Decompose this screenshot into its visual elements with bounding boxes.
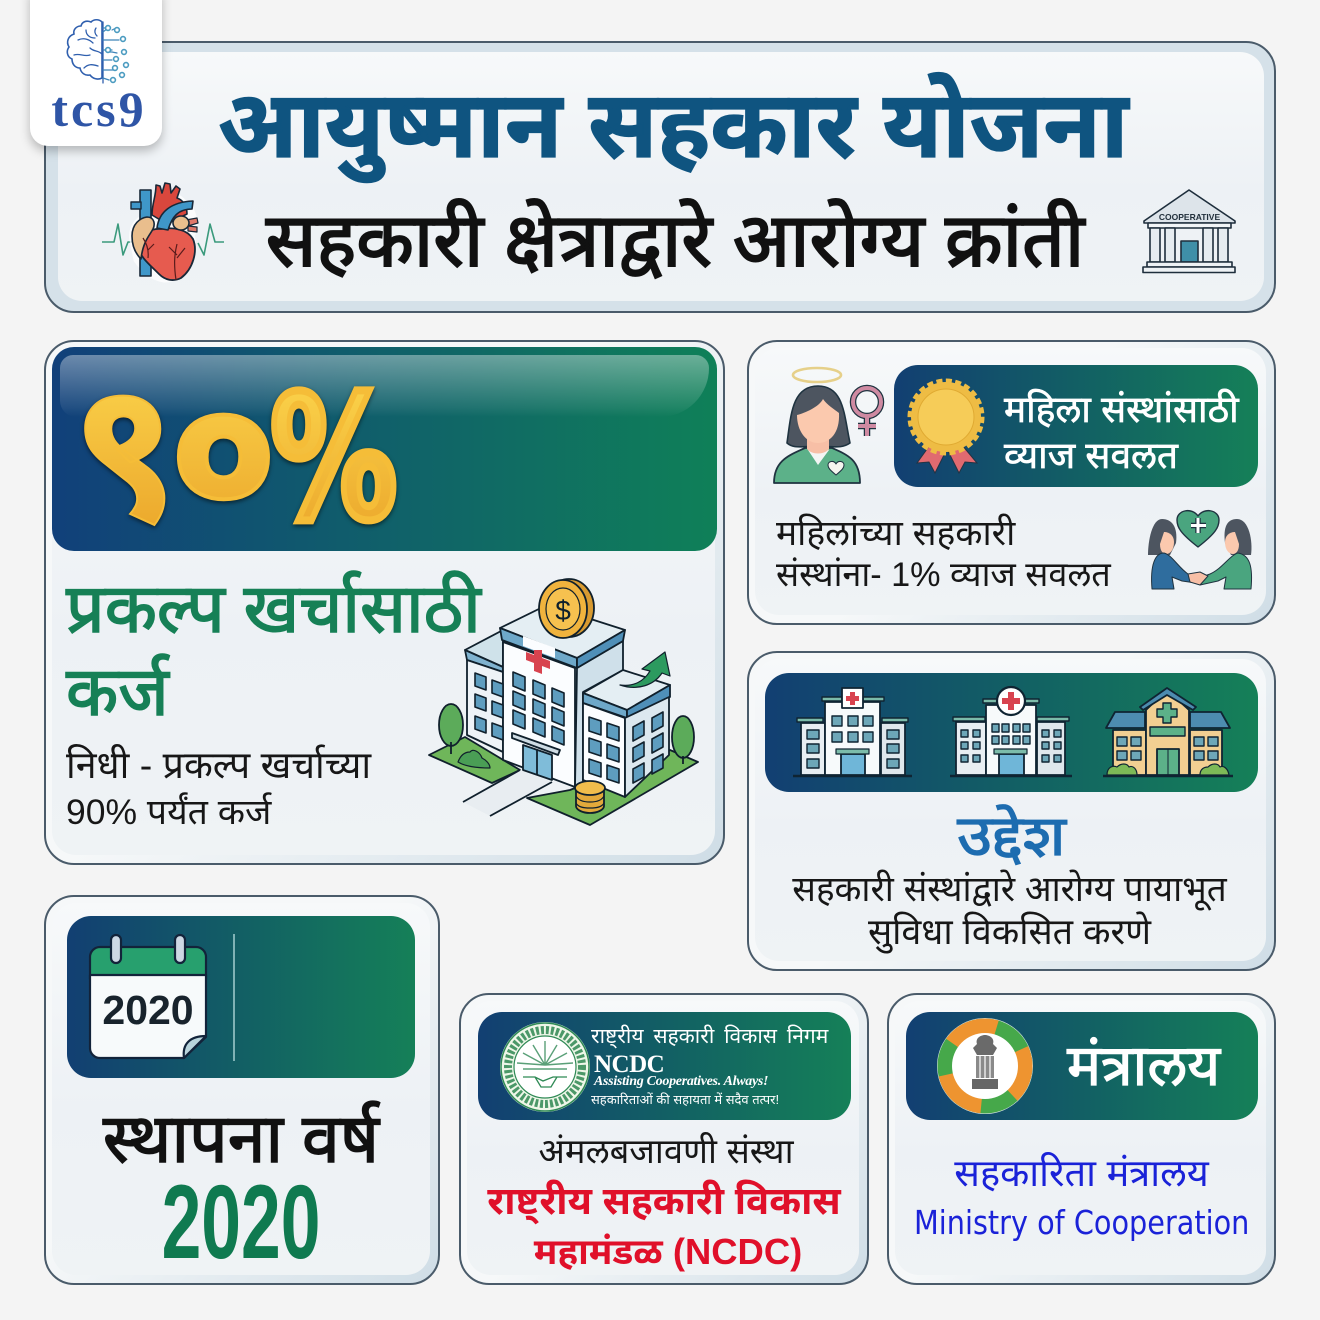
icon: cooperative bank xyxy=(1142,189,1236,274)
body text: सुविधा विकसित करणे xyxy=(868,912,1151,952)
header text: मंत्रालय xyxy=(1067,1034,1220,1098)
text: funding details: निधी - प्रकल्प खर्चाच्या xyxy=(66,744,371,786)
heading: project cost loan xyxy=(65,570,482,730)
icon: woman with halo xyxy=(773,366,884,484)
header with hospitals xyxy=(765,673,1258,792)
panel: ministry xyxy=(887,993,1276,1285)
panel: 90 percent loan xyxy=(44,340,725,865)
panel: women institutions xyxy=(747,340,1276,625)
text: NCDC full name: राष्ट्रीय सहकारी विकास xyxy=(487,1180,841,1223)
big number: ० xyxy=(169,343,278,561)
icon: cooperative bank: COOPERATIVE xyxy=(1159,212,1220,222)
body text xyxy=(792,870,1228,954)
ministry Marathi name: सहकारिता मंत्रालय xyxy=(954,1153,1209,1195)
body text: सहकारी संस्थांद्वारे आरोग्य पायाभूत xyxy=(792,870,1227,909)
body text: संस्थांना- 1% व्याज सवलत xyxy=(776,556,1111,594)
text: funding details: 90% पर्यंत कर्ज xyxy=(66,792,271,832)
gloss xyxy=(60,355,709,417)
text: NCDC full name xyxy=(487,1180,842,1272)
year: 2020 xyxy=(162,1164,320,1281)
tagline: Assisting Cooperatives. Always! xyxy=(594,1074,768,1089)
header: NCDC logo band xyxy=(478,1012,851,1120)
panel: establishment year xyxy=(44,895,440,1285)
icon: calendar 2020 xyxy=(88,934,208,1060)
heading: project cost loan: प्रकल्प खर्चासाठी xyxy=(66,571,481,647)
NCDC seal xyxy=(500,1022,590,1112)
ministry emblem xyxy=(937,1018,1033,1114)
panel: objective xyxy=(747,651,1276,971)
heading: establishment year: स्थापना वर्ष xyxy=(103,1101,379,1177)
logo card xyxy=(30,0,162,146)
header: ministry band xyxy=(906,1012,1258,1120)
panel: NCDC xyxy=(459,993,869,1285)
panel: title banner xyxy=(44,41,1276,313)
icon: hospital with coin xyxy=(428,578,699,826)
body text xyxy=(776,513,1112,594)
NCDC wordmark: NCDC xyxy=(594,1051,664,1078)
header: calendar band xyxy=(67,916,415,1078)
icon: heart with pulse xyxy=(102,182,224,282)
title: आयुष्मान सहकार योजना xyxy=(218,72,1128,177)
icon: women handshake and heart xyxy=(1148,510,1252,590)
header text: महिला संस्थांसाठी xyxy=(1004,389,1239,430)
big number: ९ xyxy=(72,343,180,558)
big number: % xyxy=(270,359,398,559)
heading: project cost loan: कर्ज xyxy=(66,654,169,730)
icon: three hospitals xyxy=(793,686,1233,778)
hospital two xyxy=(950,687,1072,776)
NCDC Hindi name: राष्ट्रीय सहकारी विकास निगम xyxy=(591,1025,828,1048)
icon: hospital with coin: $ xyxy=(555,595,571,626)
logo text: tcs9 xyxy=(51,81,147,137)
Hindi tagline: सहकारिताओं की सहायता में सदैव तत्पर! xyxy=(591,1092,779,1107)
hospital three xyxy=(1103,688,1233,776)
header text: व्याज सवलत xyxy=(1004,435,1178,476)
subtitle: सहकारी क्षेत्राद्वारे आरोग्य क्रांती xyxy=(266,198,1084,282)
icon: circuit brain xyxy=(66,19,130,84)
ministry English name: Ministry of Cooperation xyxy=(914,1203,1249,1242)
divider in calendar band xyxy=(233,934,234,1061)
text: funding details xyxy=(66,744,372,832)
header band with 90 percent xyxy=(52,347,717,551)
icon: gold medal xyxy=(908,378,984,474)
big number xyxy=(72,343,398,561)
text: implementing agency: अंमलबजावणी संस्था xyxy=(538,1133,794,1171)
hospital one xyxy=(793,688,912,776)
text: NCDC full name: महामंडळ (NCDC) xyxy=(534,1231,802,1272)
body text: महिलांच्या सहकारी xyxy=(776,513,1015,553)
header text xyxy=(1004,388,1240,476)
heading: objective: उद्देश xyxy=(957,804,1066,867)
icon: calendar 2020: 2020 xyxy=(102,987,194,1033)
header: women interest xyxy=(894,365,1258,487)
